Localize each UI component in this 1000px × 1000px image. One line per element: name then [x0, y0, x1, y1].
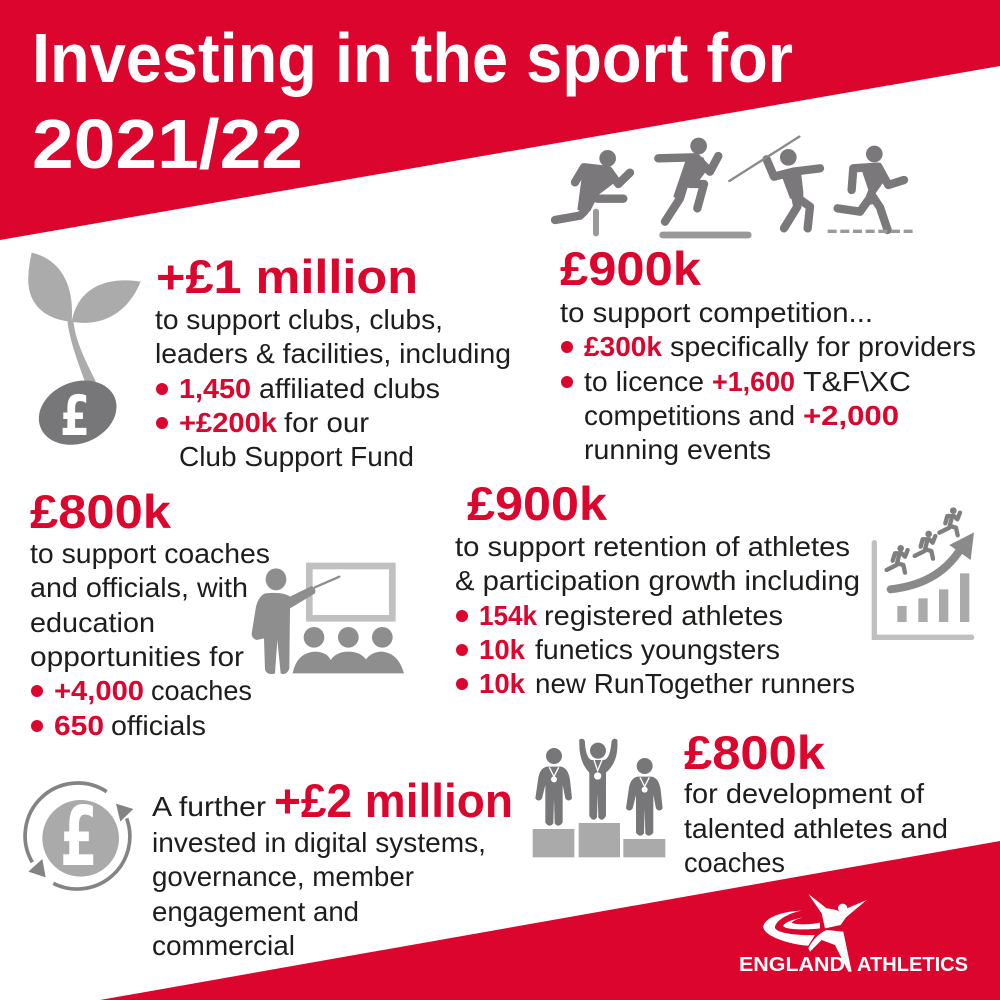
logo: England Athletics [739, 894, 968, 976]
text block: £900k retention and participation: & participation growth including [455, 565, 860, 596]
text block: £800k talent development: £800k [684, 726, 826, 779]
text block: £900k retention and participation: £900k [467, 477, 608, 530]
text block: £900k competition: £900k [560, 242, 702, 295]
text block: £800k talent development [684, 726, 948, 878]
text block: +£1 million for clubs: leaders & facilities, including [155, 338, 511, 369]
text block: further £2 million: invested in digital systems, [152, 827, 486, 858]
text block: £900k retention and participation: 154k [479, 600, 537, 631]
text block: £800k talent development: coaches [684, 847, 785, 878]
text block: £800k coaches and officials: and officials, with [30, 572, 248, 603]
text block: £900k competition: specifically for providers [670, 331, 976, 362]
text block: £900k competition: +2,000 [803, 400, 899, 431]
text block: further £2 million: A further [152, 791, 266, 822]
text block: £900k retention and participation: funetics youngsters [535, 634, 780, 665]
text block: £900k competition: to support competition... [560, 297, 873, 328]
logo: England Athletics: ENGLAND [739, 954, 845, 976]
text block: further £2 million [152, 774, 513, 961]
text block: £800k coaches and officials: to support coaches [30, 538, 270, 569]
icon: seedling with pound seed: £ [60, 384, 90, 448]
title [32, 19, 793, 183]
text block: further £2 million: engagement and [152, 896, 359, 927]
icon: seedling with pound seed [28, 253, 141, 456]
text block: further £2 million: commercial [152, 930, 295, 961]
icon: circular pound [25, 783, 133, 889]
text block: +£1 million for clubs: affiliated clubs [259, 373, 440, 404]
text block: £900k competition: competitions and [584, 400, 795, 431]
text block: £800k coaches and officials: education [30, 607, 155, 638]
text block: +£1 million for clubs: to support clubs, clubs, [155, 304, 443, 335]
text block: £900k competition: running events [584, 434, 771, 465]
text block: £800k coaches and officials: officials [111, 710, 206, 741]
title: Investing in the sport for [32, 19, 793, 97]
icon: rising chart with runners [874, 507, 974, 637]
text block: £900k competition: £300k [584, 331, 662, 362]
text block: +£1 million for clubs: for our [284, 407, 369, 438]
icon: teacher with audience [252, 566, 404, 674]
text block: £900k retention and participation: to support retention of athletes [455, 531, 850, 562]
text block: £800k coaches and officials: 650 [54, 710, 104, 741]
text block: further £2 million: governance, member [152, 861, 414, 892]
text block: further £2 million: +£2 million [274, 774, 513, 827]
bottom red banner [100, 841, 1000, 1000]
text block: £900k competition: T&F\XC [803, 366, 911, 397]
icon: four athletes [555, 137, 914, 235]
logo: England Athletics: ATHLETICS [857, 954, 968, 976]
text block: £900k competition: to licence [584, 366, 704, 397]
text block: +£1 million for clubs: +£1 million [156, 250, 418, 303]
text block: +£1 million for clubs: 1,450 [179, 373, 251, 404]
text block: +£1 million for clubs: +£200k [179, 407, 277, 438]
text block: £900k competition: +1,600 [712, 366, 795, 397]
text block: £900k competition [560, 242, 976, 465]
text block: £900k retention and participation: registered athletes [544, 600, 783, 631]
title: 2021/22 [32, 105, 303, 183]
text block: £900k retention and participation: new RunTogether runners [535, 668, 855, 699]
text block: £800k talent development: for development of [684, 778, 924, 809]
text block: £800k coaches and officials: opportunities for [30, 641, 244, 672]
icon: circular pound: £ [60, 790, 98, 885]
text block: £800k talent development: talented athletes and [684, 813, 948, 844]
top red banner [0, 0, 1000, 240]
text block: £900k retention and participation: 10k [479, 668, 525, 699]
text block: £900k retention and participation [455, 477, 860, 699]
text block: £800k coaches and officials: coaches [151, 675, 252, 706]
text block: £900k retention and participation: 10k [479, 634, 525, 665]
text block: £800k coaches and officials: £800k [30, 485, 172, 538]
text block: +£1 million for clubs: Club Support Fund [179, 441, 414, 472]
text block: £800k coaches and officials: +4,000 [54, 675, 144, 706]
text block: +£1 million for clubs [155, 250, 511, 472]
text block: £800k coaches and officials [30, 485, 270, 741]
icon: medallists on podium [533, 739, 665, 857]
